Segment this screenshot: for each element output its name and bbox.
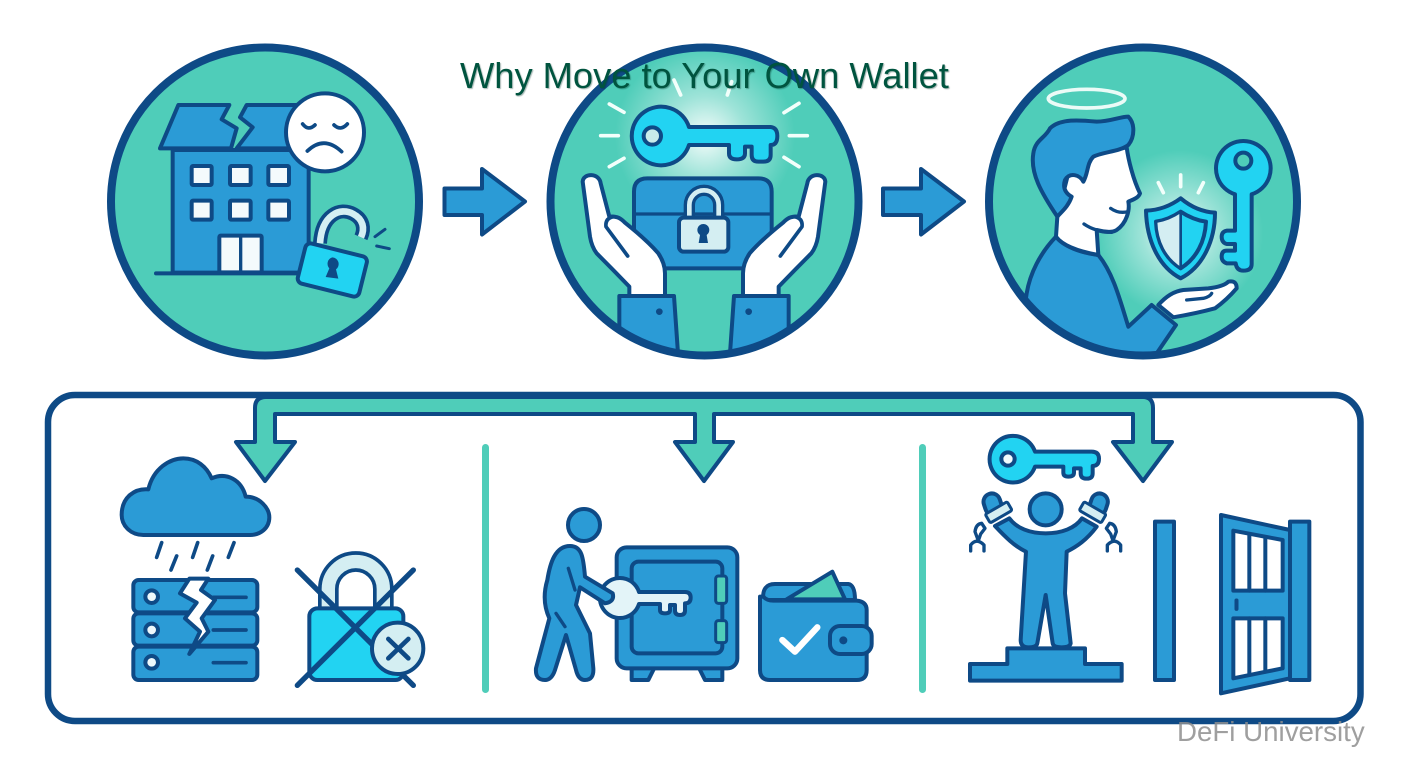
circle 3: person protected with shield and key xyxy=(989,48,1297,380)
arrow: step 2 to step 3 xyxy=(883,169,964,234)
icon: crossed-out lock xyxy=(297,561,423,685)
divider left xyxy=(482,444,489,693)
icon: cracked server stack xyxy=(133,579,257,680)
section 2: person, safe, wallet xyxy=(536,509,872,680)
connector: branching teal arrows xyxy=(236,397,1172,481)
icon: floating key xyxy=(990,436,1099,482)
divider right xyxy=(919,444,926,693)
icon: vertical bar xyxy=(1155,522,1174,680)
icon: upright key xyxy=(1216,141,1271,271)
icon: key in safe xyxy=(600,578,691,618)
icon: rain cloud xyxy=(122,458,269,570)
halo xyxy=(1048,89,1125,108)
icon: glowing key xyxy=(632,107,777,165)
icon: person with halo xyxy=(1024,114,1239,352)
title: Why Move to Your Own Wallet xyxy=(460,55,949,96)
icon: safe xyxy=(617,547,737,680)
icon: cracked building xyxy=(156,105,309,273)
section 1: cloud, broken server, crossed lock xyxy=(122,458,423,685)
arrow: step 1 to step 2 xyxy=(444,169,525,234)
icon: sad face xyxy=(286,93,364,171)
icon: treasure chest with lock xyxy=(634,178,772,268)
circle 2: taking custody of the key xyxy=(550,47,858,356)
icon: person turning key xyxy=(536,509,613,680)
panel: bottom outcomes xyxy=(48,395,1360,721)
footer: brand watermark: DeFi University xyxy=(1177,716,1365,747)
icon: open prison door xyxy=(1221,515,1309,693)
icon: shield xyxy=(1146,175,1215,278)
icon: open padlock xyxy=(297,211,389,298)
icon: person breaking chains xyxy=(970,491,1122,681)
icon: two open hands xyxy=(583,175,825,353)
section 3: freedom xyxy=(970,436,1309,693)
icon: wallet with check xyxy=(760,572,872,680)
circle 1: centralised exchange failure xyxy=(111,48,419,356)
glow rays xyxy=(601,80,807,167)
